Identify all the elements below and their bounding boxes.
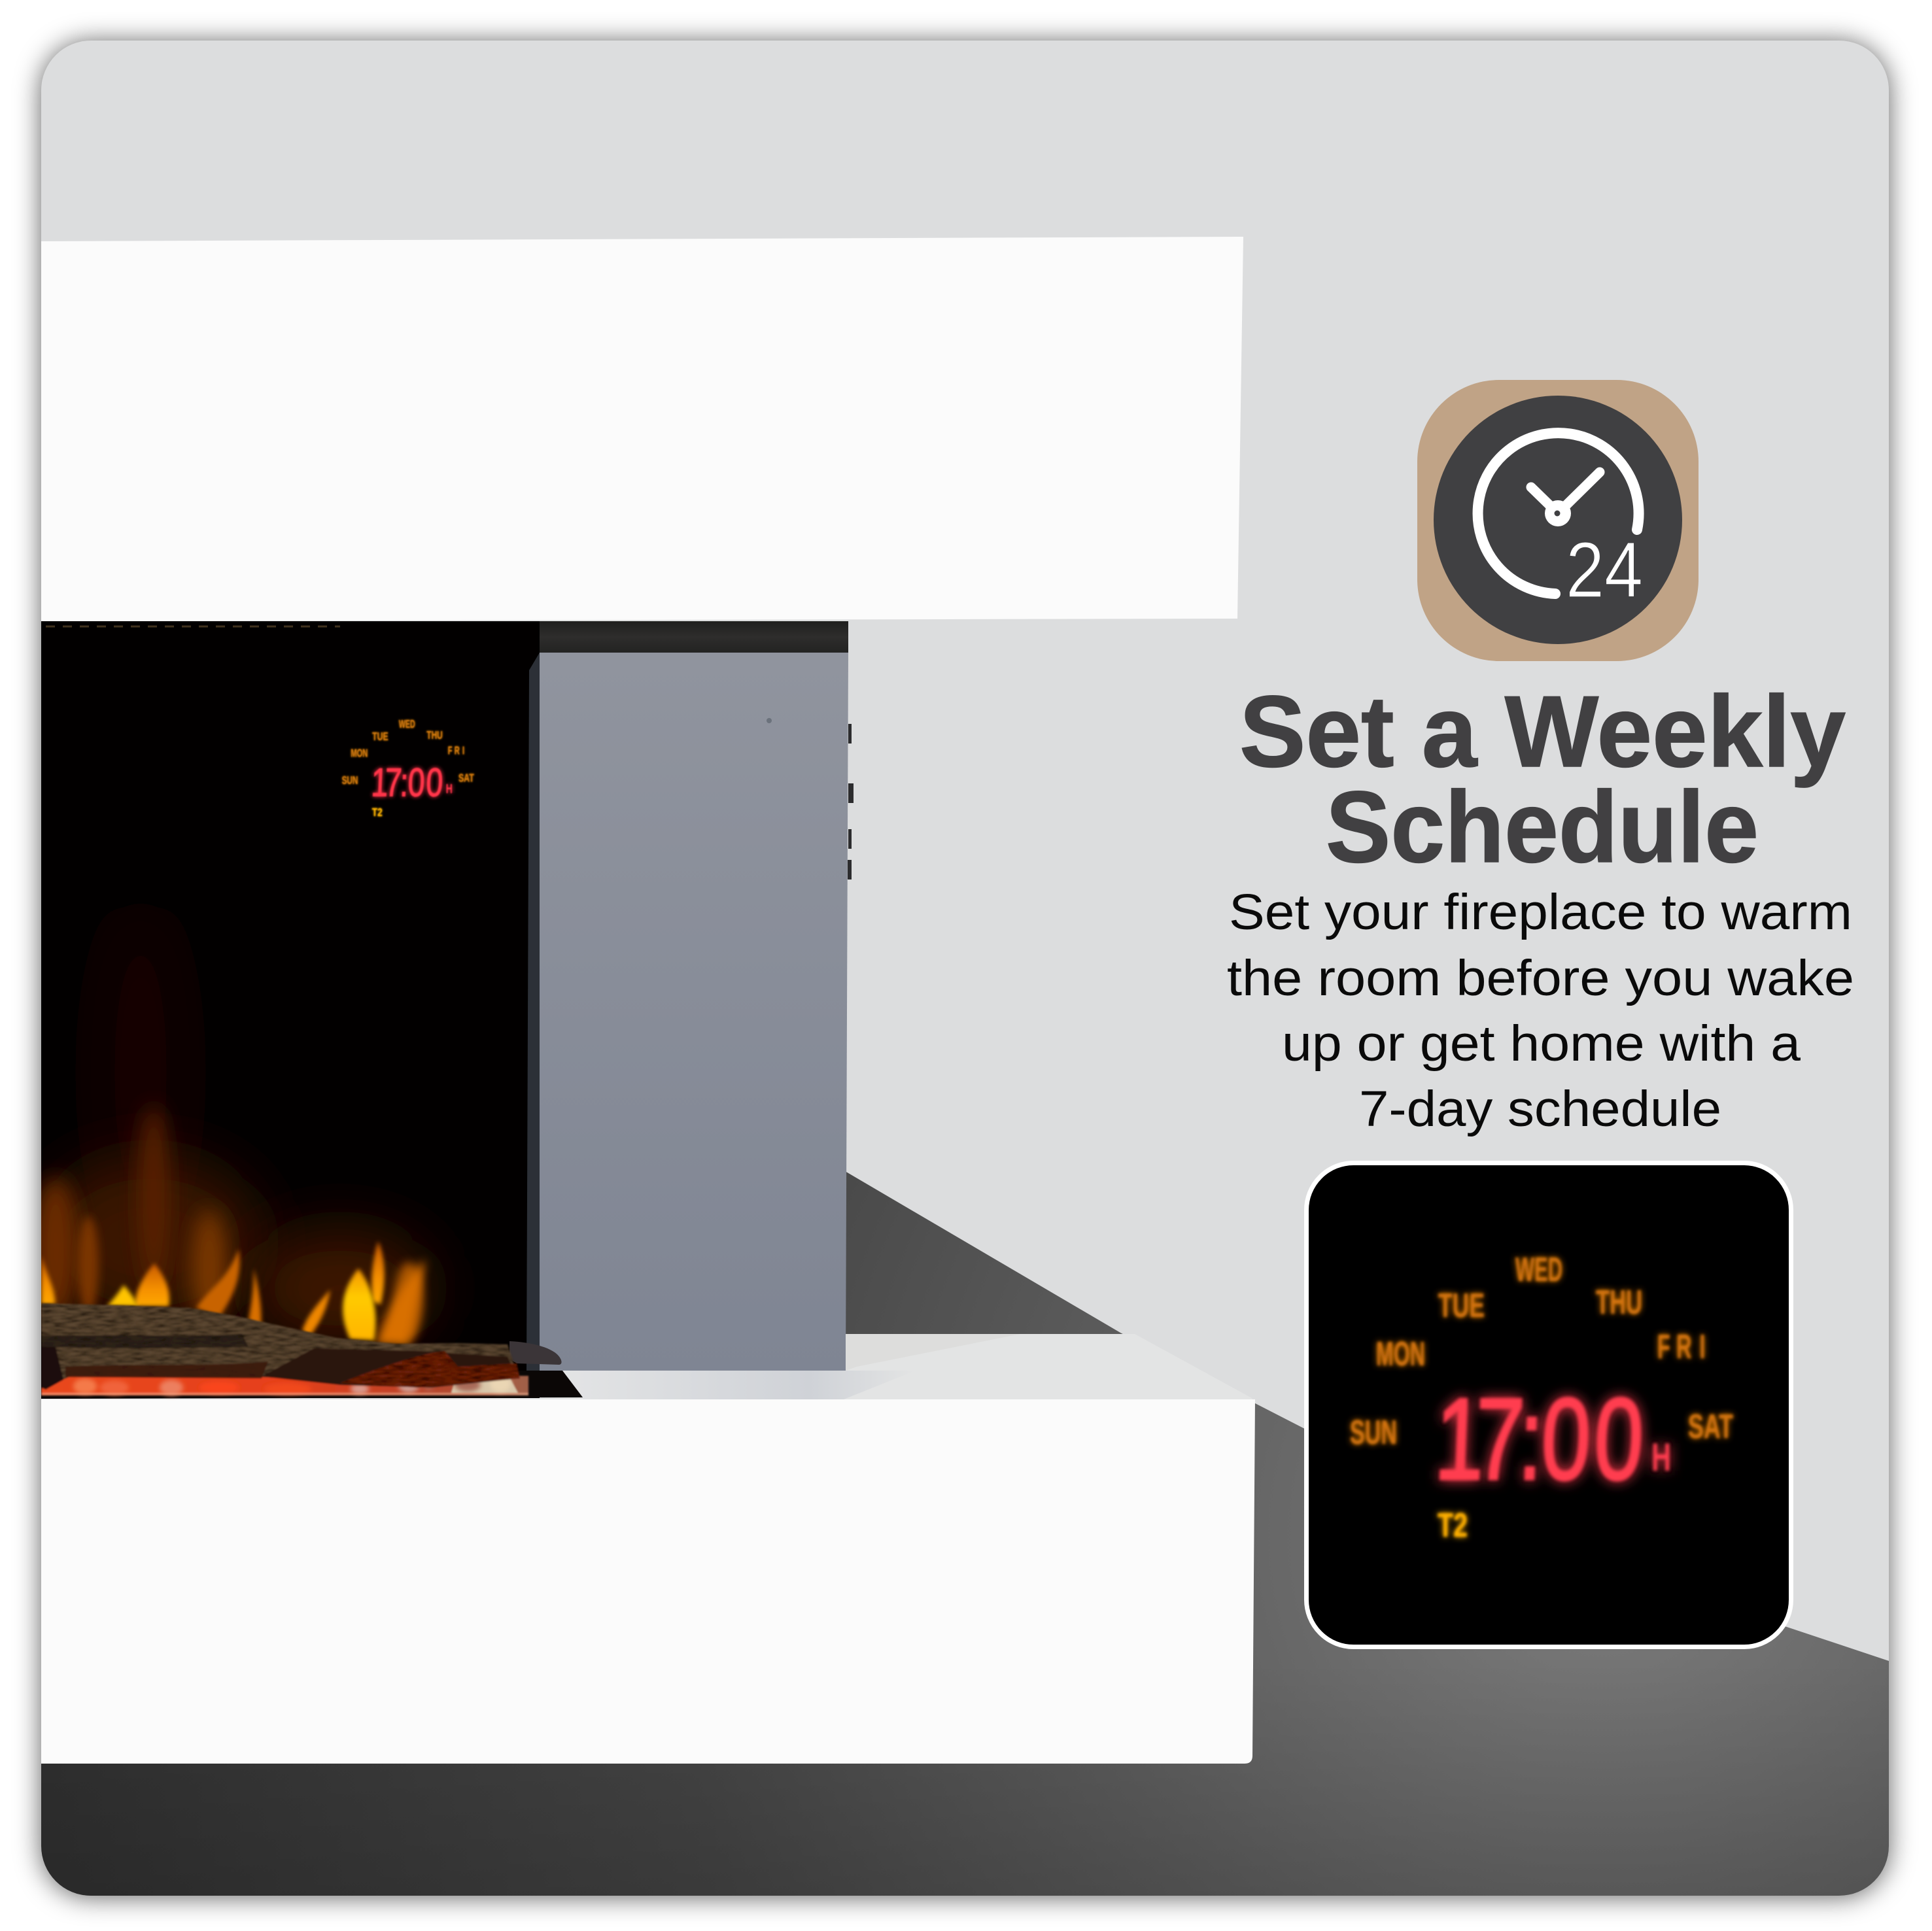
heading: Schedule: [1326, 770, 1759, 883]
timer display on glass: WED: [399, 717, 415, 730]
fireplace base: front: [41, 1399, 1255, 1764]
flame small left: [135, 1263, 169, 1307]
fireplace mantel: top shelf: [41, 237, 1243, 621]
orange tongues: [196, 1249, 239, 1318]
glass panel: [41, 621, 540, 1398]
electric fire insert: [33, 621, 583, 1399]
body text: Set your fireplace to warm: [1229, 884, 1852, 940]
program label: T2: [1438, 1507, 1468, 1545]
log shadow stratum: [41, 1334, 249, 1348]
day labels: SUN: [1350, 1414, 1397, 1452]
24 label: 24: [1566, 525, 1643, 614]
flame left edge: [41, 1256, 55, 1305]
timer display on glass: [342, 717, 474, 819]
ember bed: [41, 1367, 528, 1395]
day labels: FRI: [1657, 1328, 1705, 1366]
tray: [41, 1371, 583, 1399]
flame small yellow: [107, 1285, 138, 1307]
flame large yellow: [343, 1269, 376, 1341]
timer display on glass: TUE: [372, 730, 388, 743]
day labels: SAT: [1688, 1408, 1733, 1446]
callout: enlarged timer display: [1307, 1163, 1791, 1647]
clock hub: [1545, 500, 1571, 526]
timer display on glass: MON: [351, 746, 368, 759]
timer display on glass: SAT: [458, 772, 474, 785]
small log behind glass: [509, 1341, 562, 1365]
flames: [33, 902, 432, 1347]
timer display on glass: FRI: [448, 744, 464, 757]
heading: Set a Weekly: [1239, 675, 1846, 788]
body text: the room before you wake: [1227, 950, 1854, 1006]
icon: 24-hour clock: [1417, 380, 1699, 661]
icon disc: [1434, 396, 1682, 644]
time readout: 17:00: [1432, 1374, 1646, 1504]
timer display on glass: 17:00: [370, 760, 444, 805]
day labels: TUE: [1438, 1287, 1485, 1325]
heading: [1239, 675, 1846, 883]
day labels: WED: [1515, 1251, 1562, 1289]
body text: 7-day schedule: [1359, 1081, 1721, 1137]
logs and embers: [41, 1303, 528, 1395]
body text: [1227, 884, 1854, 1137]
glowing log: [262, 1348, 518, 1388]
day labels: MON: [1376, 1335, 1425, 1373]
fireplace column: [537, 621, 854, 1371]
display frame: [1307, 1163, 1791, 1647]
floor: [41, 1171, 1889, 1896]
day labels: [1350, 1251, 1733, 1452]
log: [41, 1303, 518, 1389]
background glow: [33, 902, 432, 1347]
timer display on glass: THU: [426, 728, 443, 742]
timer display on glass: T2: [372, 806, 383, 819]
body text: up or get home with a: [1282, 1016, 1801, 1072]
timer display on glass: SUN: [342, 774, 358, 787]
clock hands: [1531, 472, 1600, 513]
time readout: H: [1651, 1435, 1671, 1479]
clock arc: [1478, 433, 1639, 594]
LED strip reflection: [46, 625, 340, 628]
icon background: [1417, 380, 1699, 661]
day labels: THU: [1596, 1284, 1642, 1322]
fireplace base: top surface: [498, 1334, 1248, 1399]
left log end: [41, 1347, 63, 1390]
timer display on glass: H: [446, 781, 453, 796]
